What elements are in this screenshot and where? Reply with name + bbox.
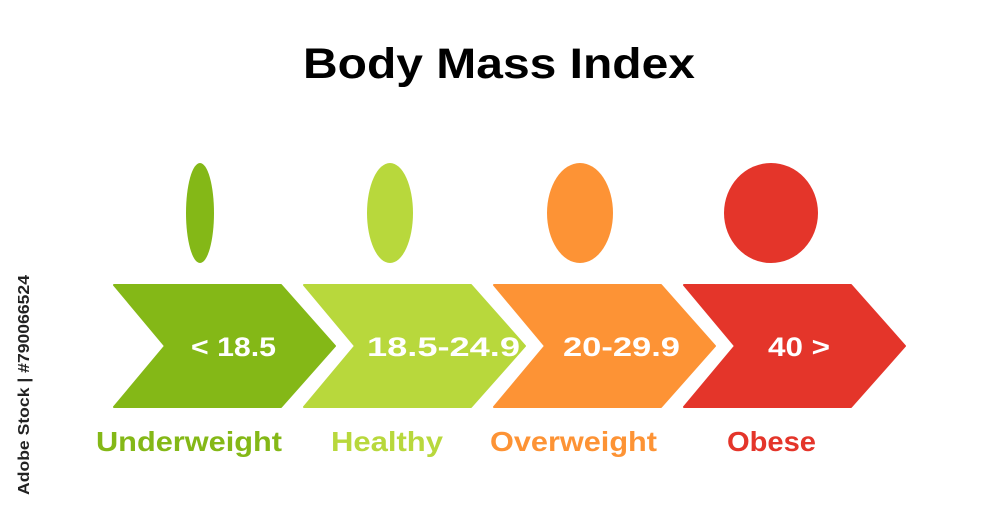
label: overweight: Overweight xyxy=(490,426,657,457)
chevron: underweight: < 18.5 xyxy=(191,332,276,362)
chevron: healthy xyxy=(304,285,525,407)
chevron: obese xyxy=(684,285,905,407)
label: obese: Obese xyxy=(727,426,816,457)
figure: underweight xyxy=(186,163,214,263)
title: Body Mass Index xyxy=(303,40,695,88)
chevron: overweight xyxy=(494,285,715,407)
chevron: obese: 40 > xyxy=(768,332,830,362)
label: underweight: Underweight xyxy=(96,426,282,457)
chevron: healthy: 18.5-24.9 xyxy=(367,332,520,362)
side watermark text: Adobe Stock | #790066524 xyxy=(16,275,33,495)
figure: obese xyxy=(724,163,818,263)
figure: overweight xyxy=(547,163,613,263)
chevron: overweight: 20-29.9 xyxy=(563,332,680,362)
chevron: underweight xyxy=(114,285,335,407)
figure: healthy xyxy=(367,163,413,263)
label: healthy: Healthy xyxy=(331,426,443,457)
